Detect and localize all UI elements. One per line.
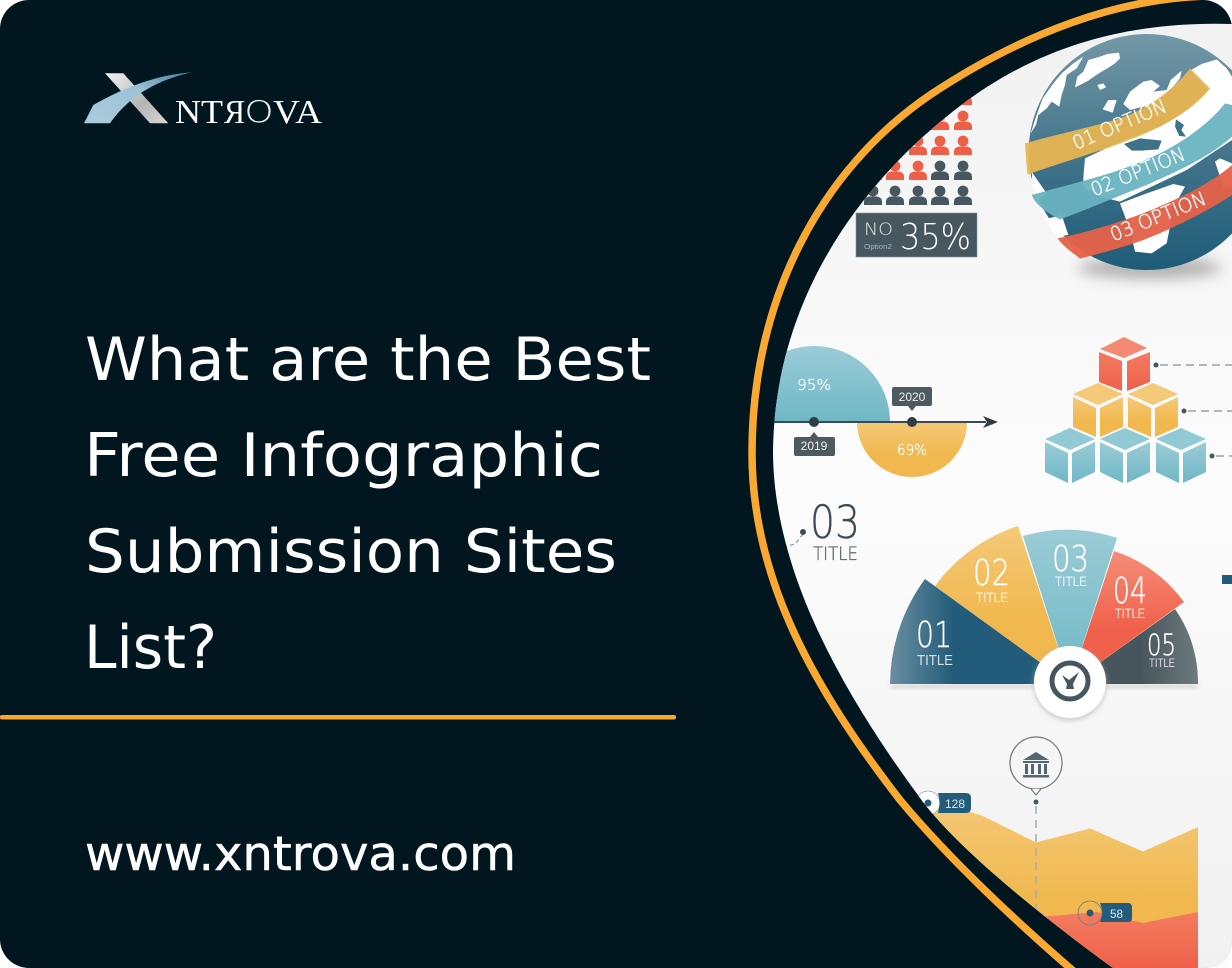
semicircle segment chart: 02 [973,553,1010,594]
ribbon 01 [1025,68,1210,175]
timeline chart [774,346,998,477]
orange cubes [1073,383,1123,437]
value tag: 128 [916,791,971,815]
semicircle segment chart: TITLE [1115,605,1145,621]
semicircle segment chart: 05 [1147,628,1176,662]
ribbon 03 [1058,165,1232,259]
segment 04 [1082,551,1184,662]
divider line [0,715,676,720]
title: Free Infographic [84,421,603,491]
segment 01 [890,579,1040,684]
icon: clock [1033,646,1107,721]
area chart [918,736,1198,968]
year label 2020 [892,387,932,411]
website url: www.xntrova.com [85,827,516,882]
segment 02 [935,526,1058,662]
callout: 03 title [786,504,857,560]
dashed leader lines [1160,365,1232,456]
title [84,325,651,683]
callout: 03 title: TITLE [813,543,858,565]
globe with option ribbons: 03 OPTION [1107,187,1209,246]
semicircle segment chart: 04 [1113,571,1147,612]
semicircle segment chart [890,526,1198,721]
logo: Xntrova: O [245,93,273,131]
orange arc [752,0,1215,968]
semicircle segment chart: 01 [916,615,952,656]
ocean spots [1124,119,1186,151]
semicircle segment chart: TITLE [1055,573,1087,589]
people pictogram [864,98,972,205]
year label 2019 [794,432,835,456]
pin: bank icon [1010,737,1062,915]
value tag: 58 [1078,901,1132,925]
globe with option ribbons: 02 OPTION [1087,143,1189,201]
title: What are the Best [85,325,651,395]
year label 2020: 2020 [899,390,926,404]
callout: 03 title: 03 [810,496,860,549]
red cube [1099,337,1150,391]
segment 03 [1023,530,1117,648]
blue cubes [1045,428,1095,483]
semicircle segment chart: TITLE [917,652,953,669]
logo: Xntrova: VA [273,94,322,131]
cube pyramid [1045,337,1232,483]
globe with option ribbons [1025,34,1232,279]
stat box: 35%: Option2 [864,244,892,251]
logo: Xntrova: Я [224,94,245,131]
image panel [738,0,1232,968]
stat box: 35%: 35% [900,217,971,258]
segment 05 [1100,609,1198,684]
ribbon 02 [1032,103,1232,219]
globe with option ribbons: 01 OPTION [1069,94,1170,155]
logo: Xntrova: NT [175,94,223,131]
year label 2019: 2019 [801,439,828,453]
stat box: 35% [856,213,977,258]
semicircle segment chart: TITLE [976,589,1008,605]
logo: Xntrova [84,72,322,131]
value tag: 58: 58 [1110,907,1123,921]
stat box: 35%: NO [864,220,893,240]
small cropped chart fragment [1222,575,1232,584]
semicircle segment chart: TITLE [1149,656,1175,670]
timeline chart: 95% [797,376,831,394]
value tag: 128: 128 [945,797,965,811]
title: List? [84,613,217,683]
title: Submission Sites [85,517,617,587]
timeline chart: 69% [897,441,927,459]
semicircle segment chart: 03 [1052,539,1089,580]
